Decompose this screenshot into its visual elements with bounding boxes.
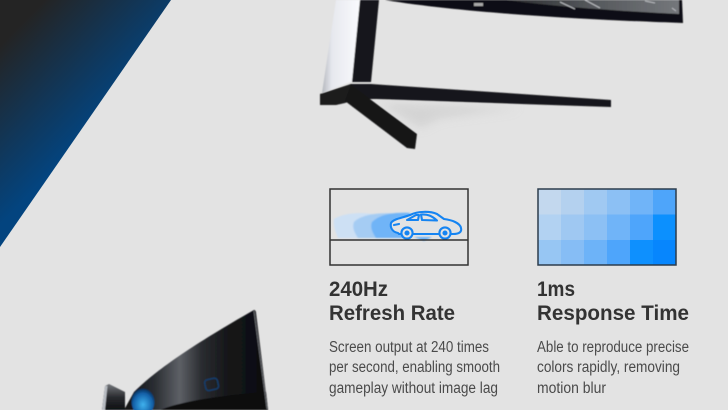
car [391, 212, 461, 239]
monitor screen image [505, 0, 679, 14]
description: motion blur [537, 380, 606, 397]
text: refresh rate: Refresh Rate [329, 302, 455, 325]
monitor back panel [124, 310, 268, 410]
description [537, 339, 689, 397]
description [329, 339, 500, 397]
motion trail [334, 213, 432, 241]
description: Able to reproduce precise [537, 339, 689, 356]
monitor rear view, bottom left [102, 310, 268, 410]
icon: refresh rate car [330, 189, 468, 265]
description: colors rapidly, removing [537, 359, 680, 376]
stand arm [102, 384, 125, 410]
screen streaks [560, 0, 676, 11]
stand shadow [378, 103, 520, 128]
heading: 240Hz [329, 278, 388, 301]
icon: response time colour grid [538, 189, 676, 265]
grid frame [538, 189, 676, 265]
heading: 1ms [537, 278, 575, 301]
description: Screen output at 240 times [329, 339, 489, 356]
silver stand column [322, 0, 361, 93]
road line [330, 239, 468, 241]
rear logo [204, 378, 219, 391]
monitor bottom edge [385, 0, 683, 23]
stand base joint [320, 84, 356, 105]
description: gameplay without image lag [329, 380, 498, 397]
text: response time [537, 278, 689, 397]
monitor on stand, top [320, 0, 683, 149]
text: refresh rate [329, 278, 500, 397]
icon frame [330, 189, 468, 265]
rear panel edge [254, 311, 267, 409]
short stand leg [345, 85, 417, 149]
long stand leg [350, 84, 611, 107]
text: response time: Response Time [537, 302, 689, 325]
black stand neck [352, 0, 379, 82]
blue light ring [132, 388, 154, 410]
description: per second, enabling smooth [329, 359, 500, 376]
rear panel lower sweep [160, 392, 268, 410]
diagonal gradient corner [0, 0, 171, 247]
monitor logo [474, 3, 483, 6]
